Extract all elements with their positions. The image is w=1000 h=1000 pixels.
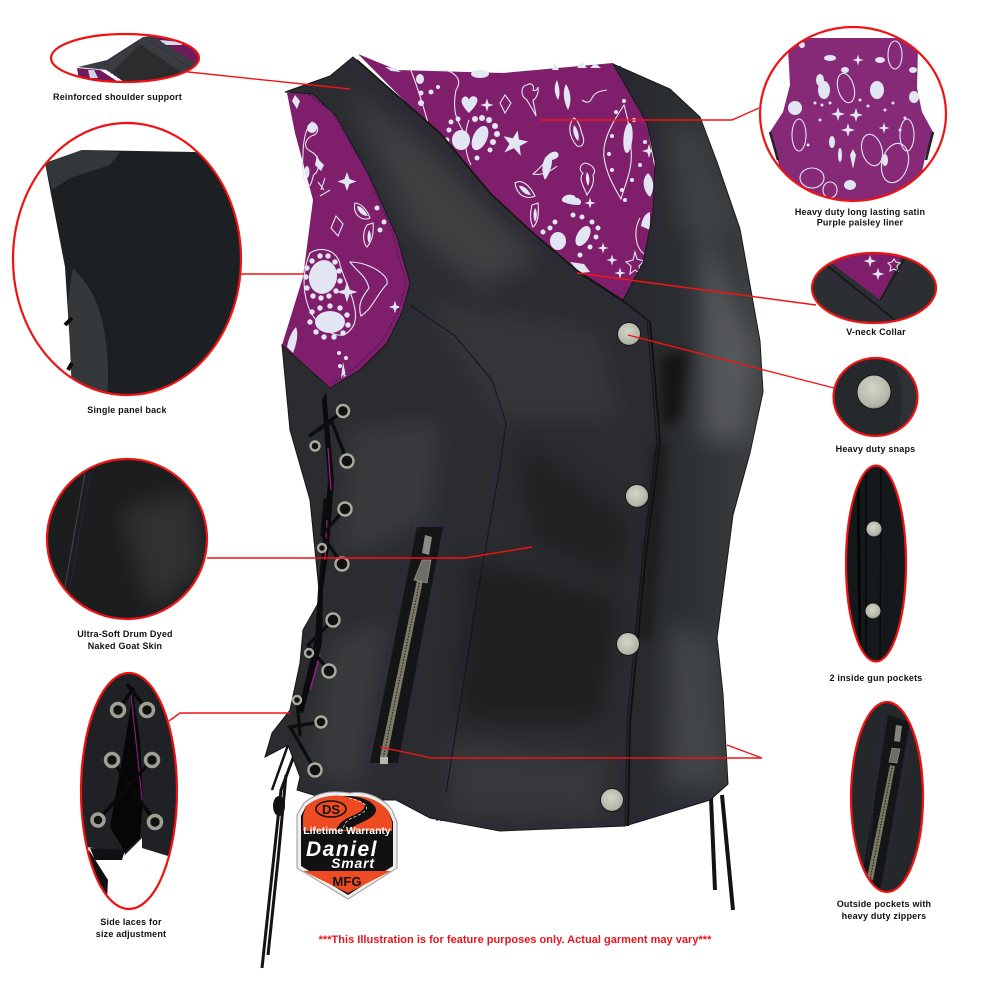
label: Heavy duty snaps: [836, 444, 915, 454]
tassel laces: [262, 745, 733, 968]
callout: back: [13, 123, 245, 415]
laces: [290, 411, 347, 770]
label: [77, 629, 173, 651]
snaps: [600, 322, 648, 812]
label: [795, 207, 925, 228]
leather: left front panel: [265, 57, 657, 831]
label: Single panel back: [87, 405, 168, 415]
label: Naked Goat Skin: [88, 641, 162, 651]
callout: snaps: [834, 358, 930, 454]
callout: goat skin: [47, 459, 207, 651]
label: 2 inside gun pockets: [829, 673, 923, 683]
callout: shoulder: [51, 34, 205, 102]
callout: zipper: [837, 702, 931, 921]
label: size adjustment: [96, 929, 166, 939]
paisley print: armhole: [287, 95, 401, 378]
liner: neck interior: [358, 54, 657, 303]
badge: Daniel Smart Lifetime Warranty: Smart: [331, 855, 375, 871]
label: Reinforced shoulder support: [53, 92, 182, 102]
disclaimer: ***This Illustration is for feature purposes only. Actual garment may vary***: [319, 934, 712, 946]
liner: armhole interior: [282, 92, 411, 390]
badge: Daniel Smart Lifetime Warranty: Daniel: [306, 838, 378, 861]
badge: Daniel Smart Lifetime Warranty: MFG: [333, 874, 361, 889]
zipper pocket: [370, 527, 443, 764]
label: Ultra-Soft Drum Dyed: [77, 629, 173, 639]
label: Outside pockets with: [837, 899, 931, 909]
seams and purple stitching: [305, 62, 708, 826]
callout: gun pockets: [829, 465, 923, 683]
badge: Daniel Smart Lifetime Warranty: [297, 792, 397, 899]
label: Heavy duty long lasting satin: [795, 207, 925, 217]
badge: Daniel Smart Lifetime Warranty: DS: [322, 802, 340, 817]
label: [837, 899, 931, 921]
paisley print: neck: [385, 62, 656, 279]
connector lines: [160, 69, 834, 758]
label: Side laces for: [100, 917, 162, 927]
label: [96, 917, 166, 939]
leather shading: [310, 85, 755, 820]
callout: side laces: [80, 673, 180, 939]
badge: Daniel Smart Lifetime Warranty: Lifetime Warranty: [303, 826, 391, 837]
vest: [262, 54, 763, 968]
callout: liner: [750, 27, 960, 228]
eyelets: [293, 405, 354, 776]
leather: right front panel: [613, 64, 763, 826]
side lacing gap: [298, 392, 334, 713]
label: heavy duty zippers: [842, 911, 926, 921]
label: Purple paisley liner: [817, 218, 904, 228]
label: V-neck Collar: [846, 327, 906, 337]
callout: v-neck: [812, 250, 936, 337]
